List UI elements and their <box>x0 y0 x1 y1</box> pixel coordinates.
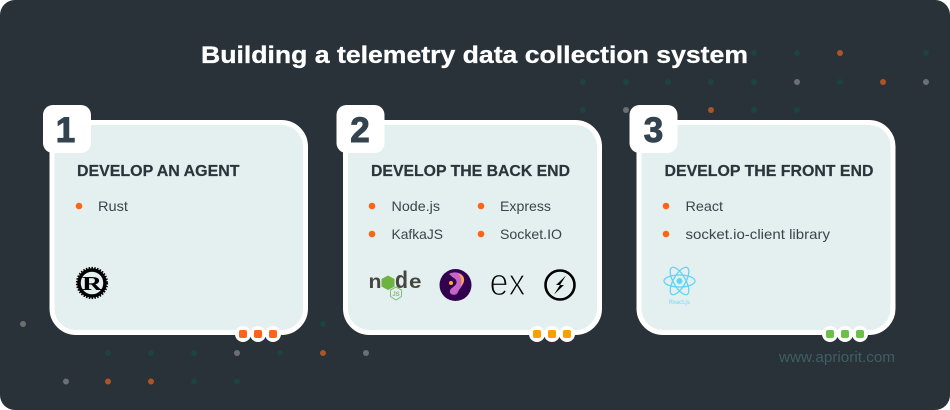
list item: Rust: Rust <box>98 198 128 214</box>
list item: React <box>663 198 723 214</box>
list item: Rust <box>76 198 128 214</box>
icon: React logo <box>664 265 695 306</box>
list item: KafkaJS: KafkaJS <box>392 226 443 242</box>
heading: develop the front end: DEVELOP THE FRONT END <box>664 163 874 180</box>
icon: Node.js logo: n <box>368 272 382 293</box>
number badge 3: 3 <box>644 111 663 150</box>
icon: Node.js logo: e <box>409 272 422 293</box>
website url: www.apriorit.com <box>778 350 895 366</box>
number badge 2 <box>336 105 384 153</box>
number badge 1 <box>43 105 91 153</box>
list item: socket.io-client library: socket.io-client library <box>686 226 830 242</box>
icon: Node.js logo: d <box>395 267 408 294</box>
list item: React: React <box>686 198 723 214</box>
list item: Express <box>478 198 551 214</box>
title: Building a telemetry data collection system <box>201 42 748 69</box>
list item: Express: Express <box>500 198 551 214</box>
list item: Node.js: Node.js <box>392 198 440 214</box>
panel: develop the front end <box>630 105 893 342</box>
panel: develop the back end <box>336 105 600 342</box>
number badge 2: 2 <box>350 111 370 150</box>
icon: KafkaJS logo <box>440 269 472 301</box>
step dots: orange <box>235 326 281 342</box>
icon: React logo: React.js <box>669 299 690 306</box>
icon: Express logo: ex <box>490 262 526 304</box>
icon: Node.js logo <box>368 267 422 300</box>
step dots: amber <box>529 326 575 342</box>
list item: Socket.IO: Socket.IO <box>500 226 562 242</box>
icon: Socket.IO logo <box>546 270 574 300</box>
number badge 1: 1 <box>56 111 75 150</box>
list item: KafkaJS <box>369 226 443 242</box>
icon: Rust logo <box>77 268 107 298</box>
heading: develop an agent: DEVELOP AN AGENT <box>77 163 240 180</box>
icon: Rust logo: R <box>82 273 103 295</box>
list item: Node.js <box>369 198 440 214</box>
heading: develop the back end: DEVELOP THE BACK END <box>371 163 570 180</box>
step dots: green <box>822 326 868 342</box>
icon: Node.js logo: JS <box>392 292 400 298</box>
number badge 3 <box>630 105 678 153</box>
panel: develop an agent <box>43 105 306 342</box>
